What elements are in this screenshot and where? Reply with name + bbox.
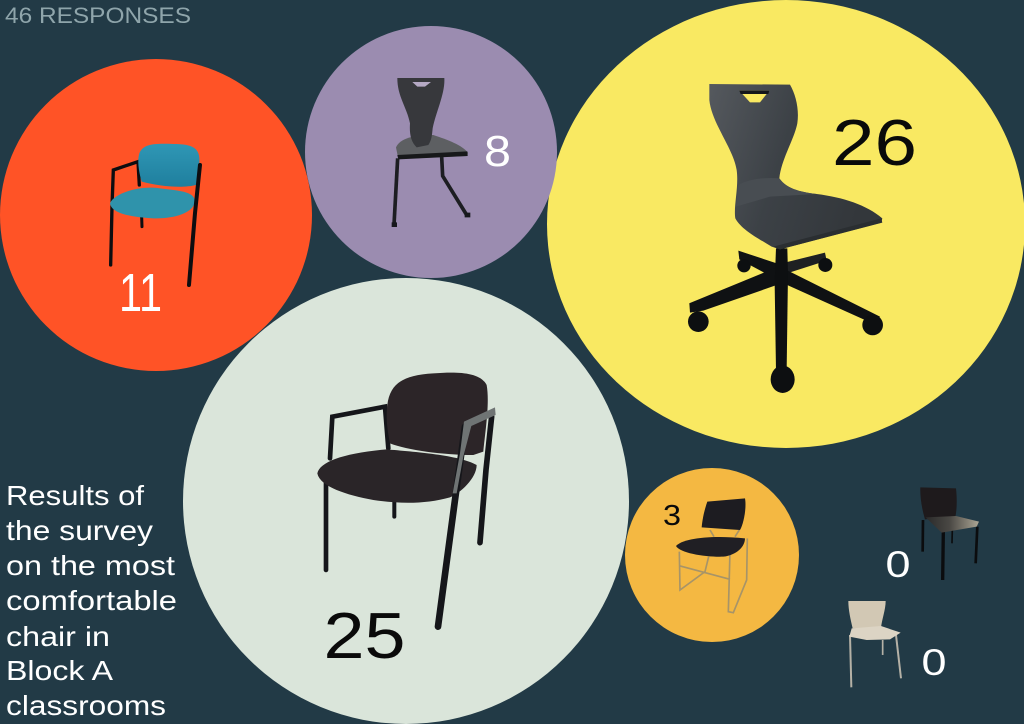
- value: 8: 8: [484, 127, 511, 176]
- panel: 25 votes pale green bubble: [183, 278, 629, 724]
- text block: survey description: on the most: [6, 550, 175, 581]
- panel: 26 votes yellow bubble: [547, 0, 1024, 448]
- text block: survey description: [6, 480, 177, 721]
- value: 26: 26: [832, 106, 917, 179]
- panel: 3 votes orange bubble: [625, 468, 799, 642]
- panel: 0 votes dark chair: [886, 487, 979, 585]
- text block: survey description: chair in: [6, 621, 110, 652]
- value: 0: 0: [922, 642, 946, 683]
- icon: dark chair with pale seat: [920, 487, 979, 580]
- panel: 0 votes white chair: [848, 601, 946, 687]
- text block: survey description: Results of: [6, 480, 144, 511]
- text block: survey description: the survey: [6, 515, 153, 546]
- icon: beige chair: [848, 601, 901, 687]
- icon: black plastic chair: [392, 78, 470, 227]
- text block: survey description: comfortable: [6, 585, 177, 616]
- panel: 8 votes purple bubble: [305, 26, 557, 278]
- text block: survey description: Block A: [6, 655, 114, 686]
- value: 25: 25: [324, 599, 406, 672]
- heading: responses count: 46 RESPONSES: [5, 3, 191, 28]
- icon: black swivel chair: [688, 84, 883, 393]
- icon: dark fabric armchair: [317, 373, 496, 627]
- text block: survey description: classrooms: [6, 690, 166, 721]
- value: 11: 11: [119, 263, 162, 323]
- panel: 11 votes red bubble: [0, 59, 312, 371]
- icon: teal armchair: [110, 144, 200, 285]
- value: 0: 0: [886, 544, 910, 585]
- icon: stacking chair: [676, 498, 747, 613]
- value: 3: 3: [663, 500, 681, 532]
